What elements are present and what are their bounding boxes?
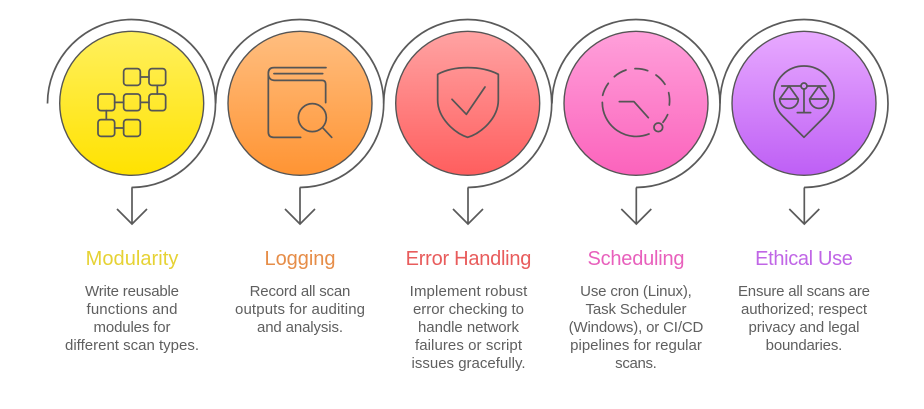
text: error handling description: failures or script — [415, 337, 523, 354]
arc and arrow 5 — [720, 20, 888, 224]
text: scheduling description: pipelines for regular — [570, 337, 702, 354]
text: modularity description: modules for — [94, 319, 170, 336]
circle 2 — [228, 31, 372, 175]
step 2: logging — [216, 20, 384, 336]
text: error handling description: issues gracefully. — [412, 355, 526, 372]
heading: Error Handling: Error Handling — [406, 248, 531, 270]
text: ethical use description: Ensure all scans are — [738, 283, 870, 300]
icon: book with magnifier — [268, 68, 332, 137]
text: modularity description — [65, 283, 199, 354]
text: ethical use description: authorized; respect — [741, 301, 868, 318]
arc and arrow 4 — [552, 20, 720, 224]
heading: Modularity: Modularity — [86, 248, 178, 270]
step 5: ethical use — [720, 20, 888, 354]
text: modularity description: functions and — [86, 301, 178, 318]
step 1: modularity — [48, 20, 216, 354]
circle 1 — [60, 31, 204, 175]
icon: dashed clock — [602, 69, 670, 136]
text: scheduling description: Use cron (Linux), — [580, 283, 692, 300]
arc and arrow 1 — [48, 20, 216, 224]
heading: Ethical Use: Ethical Use — [755, 248, 853, 270]
text: error handling description: Implement robust — [410, 283, 528, 300]
text: logging description: and analysis. — [257, 319, 343, 336]
text: ethical use description: privacy and legal — [748, 319, 860, 336]
icon: shield with check — [438, 68, 498, 137]
heading: Logging: Logging — [264, 248, 336, 270]
text: scheduling description: (Windows), or CI/CD — [569, 319, 704, 336]
circle 3 — [396, 31, 540, 175]
text: ethical use description: boundaries. — [766, 337, 842, 354]
arc and arrow 3 — [384, 20, 552, 224]
text: logging description: Record all scan — [250, 283, 350, 300]
text: ethical use description — [738, 283, 870, 354]
text: scheduling description: scans. — [615, 355, 657, 372]
text: scheduling description: Task Scheduler — [586, 301, 686, 318]
step 3: error handling — [384, 20, 552, 372]
text: scheduling description — [569, 283, 704, 372]
circle 4 — [564, 31, 708, 175]
circle 5 — [732, 31, 876, 175]
icon: connected blocks — [98, 69, 166, 136]
arc and arrow 2 — [216, 20, 384, 224]
text: modularity description: different scan types. — [65, 337, 199, 354]
text: error handling description: handle network — [418, 319, 520, 336]
text: modularity description: Write reusable — [85, 283, 179, 300]
heading: Scheduling: Scheduling — [588, 248, 684, 270]
text: error handling description: error checking to — [413, 301, 524, 318]
text: logging description: outputs for auditing — [235, 301, 365, 318]
text: error handling description — [410, 283, 528, 372]
text: logging description — [235, 283, 365, 336]
icon: scales in pin — [774, 66, 834, 137]
step 4: scheduling — [552, 20, 720, 372]
